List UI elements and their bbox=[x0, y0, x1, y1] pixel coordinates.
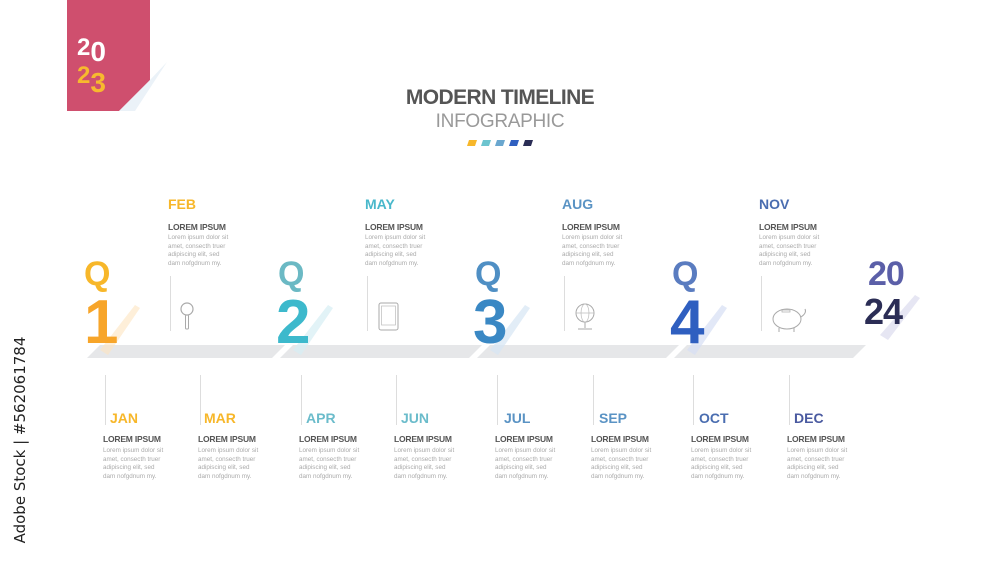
DEC bbox=[787, 375, 848, 480]
Q1: 1 bbox=[84, 288, 118, 357]
bottom columns bbox=[103, 375, 164, 480]
DEC: LOREM IPSUM bbox=[787, 434, 845, 444]
MAR: LOREM IPSUM bbox=[198, 434, 256, 444]
top column FEB: LOREM IPSUM bbox=[168, 222, 226, 232]
top column MAY bbox=[365, 196, 426, 331]
icon: globe bbox=[576, 304, 594, 330]
Q3: Q bbox=[475, 255, 501, 293]
JUL: JUL bbox=[504, 410, 530, 426]
top column AUG: Lorem ipsum dolor sit amet, consecth truer adipiscing elit, sed dam nofgdnum my. bbox=[562, 234, 622, 267]
JUL: Lorem ipsum dolor sit amet, consecth truer adipiscing elit, sed dam nofgdnum my. bbox=[495, 447, 555, 480]
top column NOV: LOREM IPSUM bbox=[759, 222, 817, 232]
OCT: Lorem ipsum dolor sit amet, consecth truer adipiscing elit, sed dam nofgdnum my. bbox=[691, 447, 751, 480]
Q3 bbox=[473, 255, 507, 357]
JUL: LOREM IPSUM bbox=[495, 434, 553, 444]
Q1: Q bbox=[84, 255, 110, 293]
2024: 20 bbox=[868, 255, 904, 293]
2024: 24 bbox=[864, 291, 902, 332]
JUN: LOREM IPSUM bbox=[394, 434, 452, 444]
JUN: Lorem ipsum dolor sit amet, consecth truer adipiscing elit, sed dam nofgdnum my. bbox=[394, 447, 454, 480]
APR: Lorem ipsum dolor sit amet, consecth truer adipiscing elit, sed dam nofgdnum my. bbox=[299, 447, 359, 480]
2024 bbox=[864, 255, 904, 332]
top column AUG bbox=[562, 196, 622, 331]
top column AUG: AUG bbox=[562, 196, 593, 212]
top column NOV bbox=[759, 196, 820, 332]
Q2: 2 bbox=[276, 288, 310, 357]
side credit: Adobe Stock | #562061784 bbox=[11, 337, 29, 543]
top column MAY: MAY bbox=[365, 196, 395, 212]
top column MAY: LOREM IPSUM bbox=[365, 222, 423, 232]
badge 2023 bbox=[67, 0, 166, 111]
JUL bbox=[495, 375, 556, 480]
title: INFOGRAPHIC bbox=[436, 111, 564, 132]
Q3: 3 bbox=[473, 288, 507, 357]
APR: APR bbox=[306, 410, 336, 426]
top column AUG: LOREM IPSUM bbox=[562, 222, 620, 232]
Q4: Q bbox=[672, 255, 698, 293]
bottom columns: Lorem ipsum dolor sit amet, consecth truer adipiscing elit, sed dam nofgdnum my. bbox=[103, 447, 163, 480]
OCT: LOREM IPSUM bbox=[691, 434, 749, 444]
APR bbox=[299, 375, 360, 480]
bottom columns: LOREM IPSUM bbox=[103, 434, 161, 444]
SEP bbox=[591, 375, 652, 480]
Q2: Q bbox=[278, 255, 304, 293]
top column FEB bbox=[168, 196, 228, 331]
MAR: Lorem ipsum dolor sit amet, consecth truer adipiscing elit, sed dam nofgdnum my. bbox=[198, 447, 258, 480]
Q2 bbox=[276, 255, 310, 357]
badge 2023: 20 bbox=[77, 34, 106, 67]
JUN bbox=[394, 375, 454, 480]
JUN: JUN bbox=[401, 410, 429, 426]
top column NOV: Lorem ipsum dolor sit amet, consecth truer adipiscing elit, sed dam nofgdnum my. bbox=[759, 234, 819, 267]
Q4 bbox=[670, 255, 704, 357]
APR: LOREM IPSUM bbox=[299, 434, 357, 444]
SEP: SEP bbox=[599, 410, 627, 426]
top column MAY: Lorem ipsum dolor sit amet, consecth truer adipiscing elit, sed dam nofgdnum my. bbox=[365, 234, 425, 267]
MAR bbox=[198, 375, 258, 480]
SEP: LOREM IPSUM bbox=[591, 434, 649, 444]
icon: piggy bank bbox=[772, 308, 806, 332]
MAR: MAR bbox=[204, 410, 236, 426]
icon: tablet bbox=[378, 302, 398, 330]
bottom columns: JAN bbox=[110, 410, 138, 426]
SEP: Lorem ipsum dolor sit amet, consecth truer adipiscing elit, sed dam nofgdnum my. bbox=[591, 447, 651, 480]
top column FEB: FEB bbox=[168, 196, 196, 212]
icon: magnifier bbox=[180, 302, 194, 330]
DEC: Lorem ipsum dolor sit amet, consecth truer adipiscing elit, sed dam nofgdnum my. bbox=[787, 447, 847, 480]
Q4: 4 bbox=[670, 288, 704, 357]
OCT bbox=[691, 375, 752, 480]
badge 2023: 23 bbox=[77, 62, 106, 98]
top column NOV: NOV bbox=[759, 196, 789, 212]
top column FEB: Lorem ipsum dolor sit amet, consecth truer adipiscing elit, sed dam nofgdnum my. bbox=[168, 234, 228, 267]
title: MODERN TIMELINE bbox=[406, 86, 594, 109]
OCT: OCT bbox=[699, 410, 729, 426]
Q1 bbox=[84, 255, 118, 357]
title bbox=[406, 86, 594, 146]
DEC: DEC bbox=[794, 410, 824, 426]
